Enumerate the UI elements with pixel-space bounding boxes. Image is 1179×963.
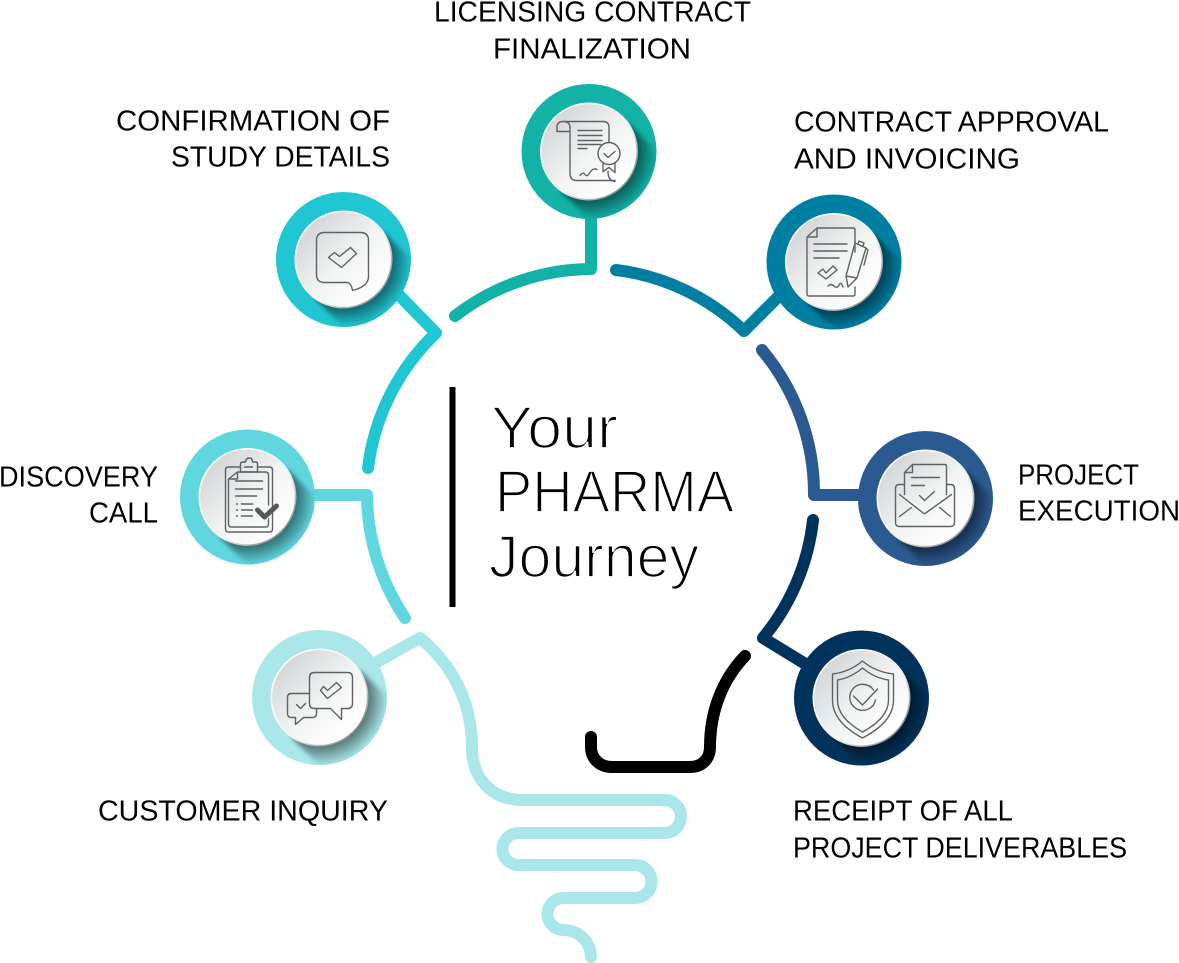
label: contract approval and invoicing xyxy=(794,106,1109,175)
bulb segment: black socket xyxy=(591,656,745,767)
bulb segment: licensing contract finalization xyxy=(455,212,591,316)
node: receipt of all project deliverables xyxy=(794,630,942,778)
label: licensing contract finalization xyxy=(434,0,751,65)
label: contract approval and invoicing: CONTRACT APPROVAL xyxy=(794,106,1109,138)
node: project execution xyxy=(858,431,1006,578)
label: customer inquiry: CUSTOMER INQUIRY xyxy=(98,795,388,827)
icon: two speech bubbles xyxy=(288,672,352,724)
bulb segment: project execution xyxy=(762,350,865,495)
label: project execution xyxy=(1018,459,1179,527)
icon: shield with check xyxy=(832,661,894,738)
label: receipt of all project deliverables xyxy=(793,795,1127,864)
label: discovery call: CALL xyxy=(89,497,158,529)
node: contract approval and invoicing xyxy=(766,194,914,342)
label: confirmation of study details xyxy=(116,105,390,173)
title line: PHARMA: PHARMA xyxy=(495,459,735,525)
icon: speech bubble with check xyxy=(316,232,368,290)
label: discovery call: DISCOVERY xyxy=(0,461,158,493)
bulb outline: customer inquiry segment and base xyxy=(375,638,681,957)
title: Your PHARMA Journey xyxy=(450,387,735,607)
bulb segment: receipt of all project deliverables xyxy=(763,520,813,668)
bulb segment: confirmation of study details xyxy=(368,291,436,468)
node: confirmation of study details xyxy=(276,192,424,340)
label: receipt of all project deliverables: PROJECT DELIVERABLES xyxy=(793,832,1127,864)
icon: signed document and pen xyxy=(807,228,868,296)
title line: Your: Your xyxy=(491,395,618,461)
icon: envelope with letter xyxy=(896,464,954,526)
title line: Journey: Journey xyxy=(489,524,699,590)
node: customer inquiry xyxy=(252,630,400,778)
icon: clipboard checklist xyxy=(226,458,276,532)
bulb segment: discovery call xyxy=(300,495,405,618)
title divider bar xyxy=(450,387,456,607)
bulb segment: contract approval and invoicing xyxy=(616,270,785,331)
label: confirmation of study details: CONFIRMATION OF xyxy=(116,105,390,137)
label: discovery call xyxy=(0,461,158,529)
node: discovery call xyxy=(180,430,328,577)
label: contract approval and invoicing: AND INVOICING xyxy=(794,143,1020,175)
icon: certificate scroll xyxy=(557,122,620,182)
label: receipt of all project deliverables: RECEIPT OF ALL xyxy=(793,795,1013,827)
label: project execution: PROJECT xyxy=(1018,459,1139,491)
node: licensing contract finalization xyxy=(522,84,669,232)
label: confirmation of study details: STUDY DETAILS xyxy=(171,141,390,173)
label: licensing contract finalization: FINALIZATION xyxy=(493,33,691,65)
